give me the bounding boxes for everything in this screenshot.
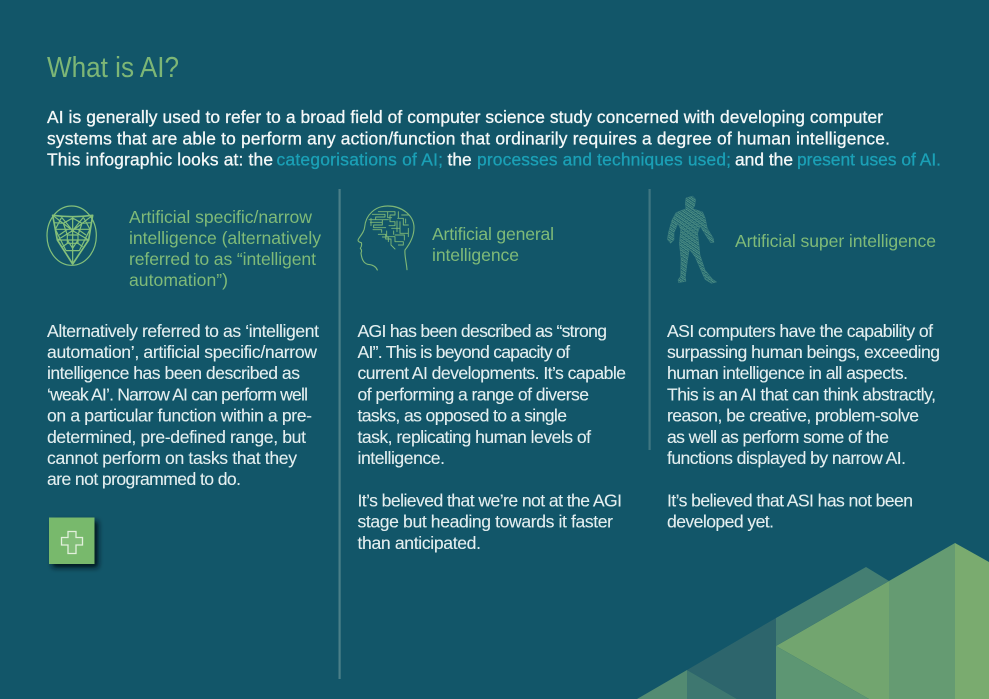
text block: general AI description: task, replicating human levels of [358, 427, 591, 447]
text block: general AI description: intelligence. [358, 448, 445, 468]
intro paragraph: systems that are able to perform any action/function that ordinarily requires a degree of human intelligence. [47, 128, 890, 148]
text block: super AI description: functions displayed by narrow AI. [667, 448, 906, 468]
heading: narrow AI: Artificial specific/narrow [129, 207, 312, 227]
text block: general AI description: current AI developments. It’s capable [358, 363, 626, 383]
text block: narrow AI description: cannot perform on tasks that they [47, 448, 297, 468]
icon: geometric face [47, 206, 96, 265]
text block: narrow AI description: ‘weak AI’. Narrow AI can perform well [47, 384, 308, 404]
text block: super AI description: as well as perform some of the [667, 427, 889, 447]
decorative mountains [637, 543, 989, 699]
text block: narrow AI description: intelligence has been described as [47, 363, 300, 383]
text block: narrow AI description: Alternatively referred to as ‘intelligent [47, 321, 319, 341]
text block: super AI description: developed yet. [667, 512, 774, 532]
intro paragraph: and the [735, 150, 793, 170]
intro paragraph: present uses of AI. [797, 150, 941, 170]
text block: narrow AI description: determined, pre-defined range, but [47, 427, 306, 447]
heading: general AI: Artificial general [432, 224, 554, 244]
text block: general AI description [358, 321, 626, 553]
text block: general AI description: than anticipated. [358, 533, 481, 553]
intro paragraph: This infographic looks at: the [47, 150, 273, 170]
text block: super AI description: This is an AI that can think abstractly, [667, 384, 936, 404]
column divider 2 [648, 189, 651, 450]
heading: narrow AI: referred to as “intelligent [129, 249, 316, 269]
heading: super AI: Artificial super intelligence [735, 231, 936, 251]
text block: super AI description: It’s believed that ASI has not been [667, 490, 913, 510]
heading: narrow AI [129, 207, 321, 290]
intro paragraph: categorisations of AI; [276, 150, 443, 170]
icon: head with circuit brain [358, 206, 414, 270]
intro paragraph: processes and techniques used; [477, 150, 731, 170]
text block: general AI description: tasks, as opposed to a single [358, 406, 567, 426]
text block: super AI description: ASI computers have the capability of [667, 321, 933, 341]
text block: narrow AI description [47, 321, 319, 489]
text block: super AI description: surpassing human beings, exceeding [667, 342, 940, 362]
panel: artificial narrow intelligence [47, 206, 321, 564]
intro paragraph: the [448, 150, 472, 170]
text block: general AI description: AI”. This is beyond capacity of [358, 342, 570, 362]
button: expand plus [49, 518, 94, 564]
text block: narrow AI description: on a particular function within a pre- [47, 406, 312, 426]
heading: general AI: intelligence [432, 245, 519, 265]
text block: general AI description: of performing a range of diverse [358, 384, 589, 404]
text block: narrow AI description: are not programmed to do. [47, 469, 241, 489]
heading: narrow AI: automation”) [129, 270, 228, 290]
text block: super AI description: reason, be creative, problem-solve [667, 406, 919, 426]
column divider 1 [338, 189, 341, 679]
heading: narrow AI: intelligence (alternatively [129, 228, 321, 248]
icon: human figure [667, 196, 717, 283]
text block: general AI description: It’s believed that we’re not at the AGI [358, 490, 622, 510]
text block: general AI description: stage but heading towards it faster [358, 512, 613, 532]
text block: general AI description: AGI has been described as “strong [358, 321, 607, 341]
text block: super AI description [667, 321, 940, 532]
panel: artificial general intelligence [358, 206, 626, 553]
text block: narrow AI description: automation’, artificial specific/narrow [47, 342, 317, 362]
intro paragraph [47, 107, 941, 170]
title: What is AI? [47, 52, 179, 84]
text block: super AI description: human intelligence in all aspects. [667, 363, 908, 383]
intro paragraph: AI is generally used to refer to a broad field of computer science study concerned with developing computer [47, 107, 883, 127]
heading: general AI [432, 224, 554, 265]
panel: artificial super intelligence [667, 196, 940, 532]
